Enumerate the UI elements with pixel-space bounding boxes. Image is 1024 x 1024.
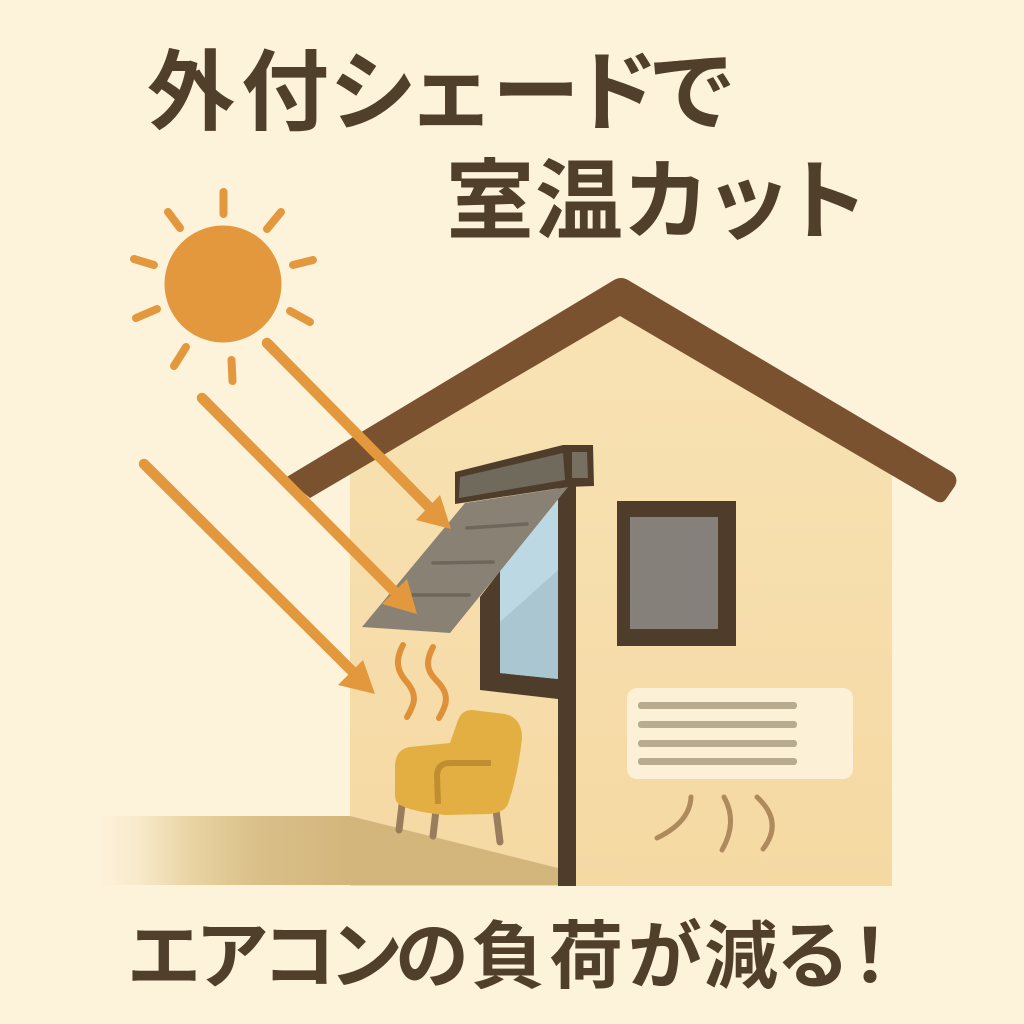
wall corner post <box>558 480 576 886</box>
window with glass <box>480 495 558 699</box>
ground <box>100 816 558 885</box>
arrow 3 <box>144 464 375 694</box>
title line 1: 外付シェードで <box>147 43 736 142</box>
arrow 2 <box>202 398 417 614</box>
icon: sun <box>134 192 313 381</box>
roof <box>285 278 956 502</box>
arrow 1 <box>267 343 451 529</box>
external shade <box>362 487 568 633</box>
armchair <box>395 710 522 842</box>
air conditioner <box>627 688 853 779</box>
bottom caption: エアコンの負荷が減る！ <box>127 915 907 998</box>
airflow lines <box>657 797 772 850</box>
heat waves <box>398 645 446 718</box>
shade box <box>455 445 594 504</box>
title line 2: 室温カット <box>446 152 869 251</box>
house wall <box>350 312 892 886</box>
right window <box>617 501 736 646</box>
